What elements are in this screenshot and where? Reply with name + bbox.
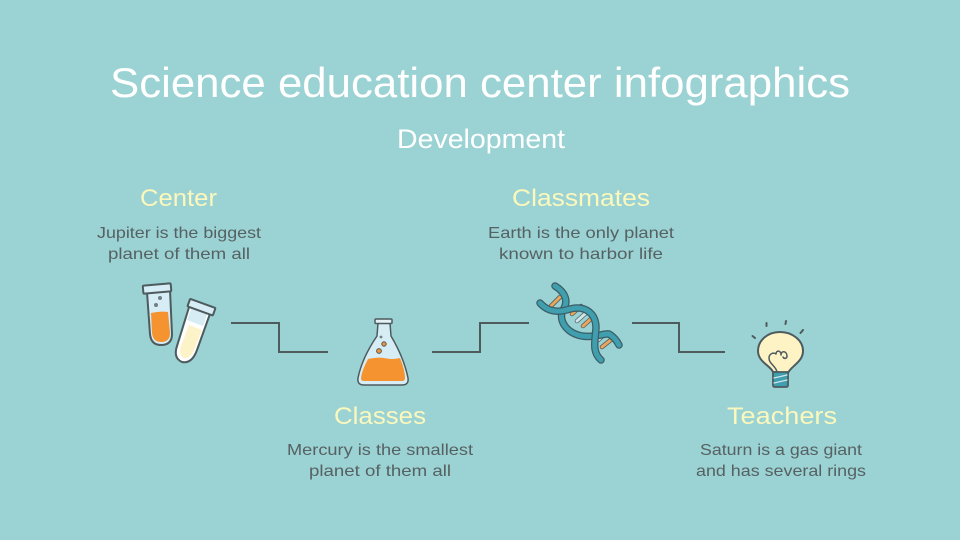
step: Center text bbox=[97, 185, 262, 263]
step: Classmates text bbox=[488, 185, 675, 263]
step: Teachers text: Teachers bbox=[727, 403, 837, 430]
step: Classes text: planet of them all bbox=[309, 463, 451, 480]
step: Classes text bbox=[287, 403, 474, 480]
icon: flask bbox=[358, 319, 408, 385]
icon: DNA helix bbox=[540, 286, 619, 360]
step: Classmates text: Classmates bbox=[512, 185, 650, 212]
step: Teachers text bbox=[696, 403, 866, 480]
step: Center text: planet of them all bbox=[108, 246, 250, 263]
step: Center text: Center bbox=[140, 185, 217, 212]
icon: test tubes bbox=[143, 283, 216, 362]
step: Teachers text: and has several rings bbox=[696, 463, 866, 480]
arrow: step connector 1 bbox=[231, 323, 328, 352]
step: Classes text: Classes bbox=[334, 403, 426, 430]
step: Classmates text: Earth is the only planet bbox=[488, 225, 675, 242]
arrow: step connector 2 bbox=[432, 323, 529, 352]
arrow: step connector 3 bbox=[632, 323, 725, 352]
icon: light bulb bbox=[752, 321, 803, 387]
step: Classmates text: known to harbor life bbox=[499, 246, 663, 263]
subtitle: Development bbox=[397, 124, 566, 154]
title: Science education center infographics bbox=[110, 59, 850, 106]
step: Teachers text: Saturn is a gas giant bbox=[700, 442, 863, 459]
step: Center text: Jupiter is the biggest bbox=[97, 225, 262, 242]
step: Classes text: Mercury is the smallest bbox=[287, 442, 474, 459]
